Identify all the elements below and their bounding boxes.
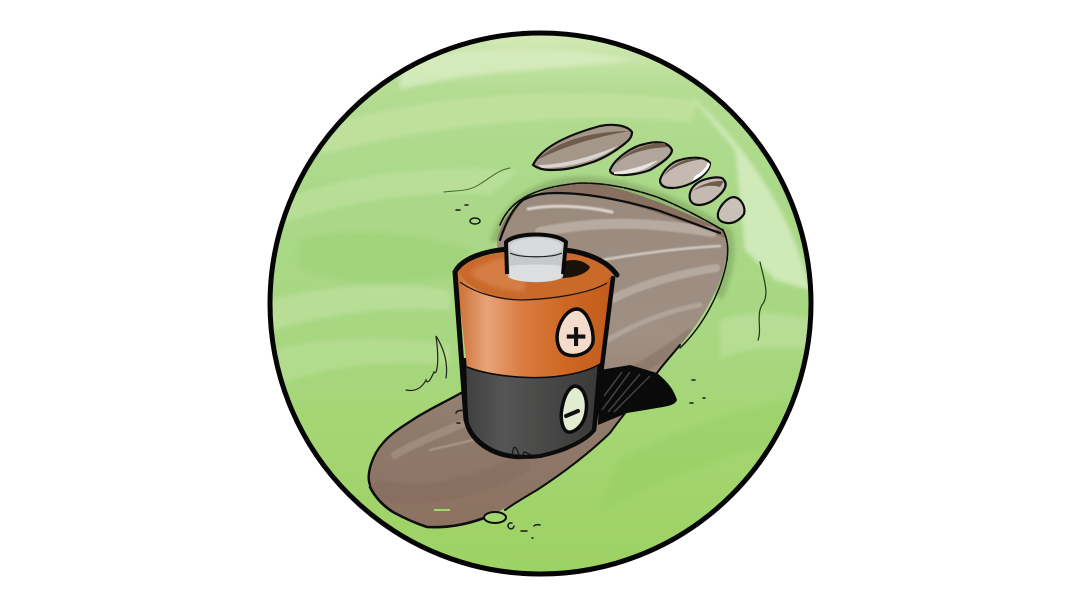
battery ink edges: [455, 249, 617, 457]
glass terminal: [506, 234, 566, 282]
circle border: [270, 33, 811, 574]
plus symbol: +: [565, 316, 587, 357]
orange upper body: [456, 272, 612, 377]
black lower body: [464, 360, 600, 457]
battery: [455, 234, 617, 458]
minus symbol: [561, 386, 587, 432]
second toe: [610, 142, 672, 175]
terminal recess: [562, 260, 590, 278]
illustration: battery standing in a green footprint badge: [268, 30, 814, 576]
green circular background: [270, 34, 812, 574]
grass tuft: [406, 336, 447, 391]
fourth toe: [690, 177, 726, 205]
plus symbol: [557, 309, 593, 357]
footprint sole: [369, 175, 730, 527]
small pebbles: [456, 205, 705, 538]
pebble at heel: [484, 512, 506, 523]
footprint ink outline: [369, 183, 728, 527]
battery cast shadow: [598, 365, 677, 425]
orange top cap: [458, 250, 614, 300]
scribble at battery base: [512, 436, 590, 458]
ink squiggle upper left: [444, 168, 510, 192]
little toe: [718, 197, 744, 223]
third toe: [660, 158, 710, 188]
big toe: [533, 125, 632, 170]
footprint top shadow halo: [490, 176, 734, 300]
ink squiggle right: [758, 262, 766, 340]
